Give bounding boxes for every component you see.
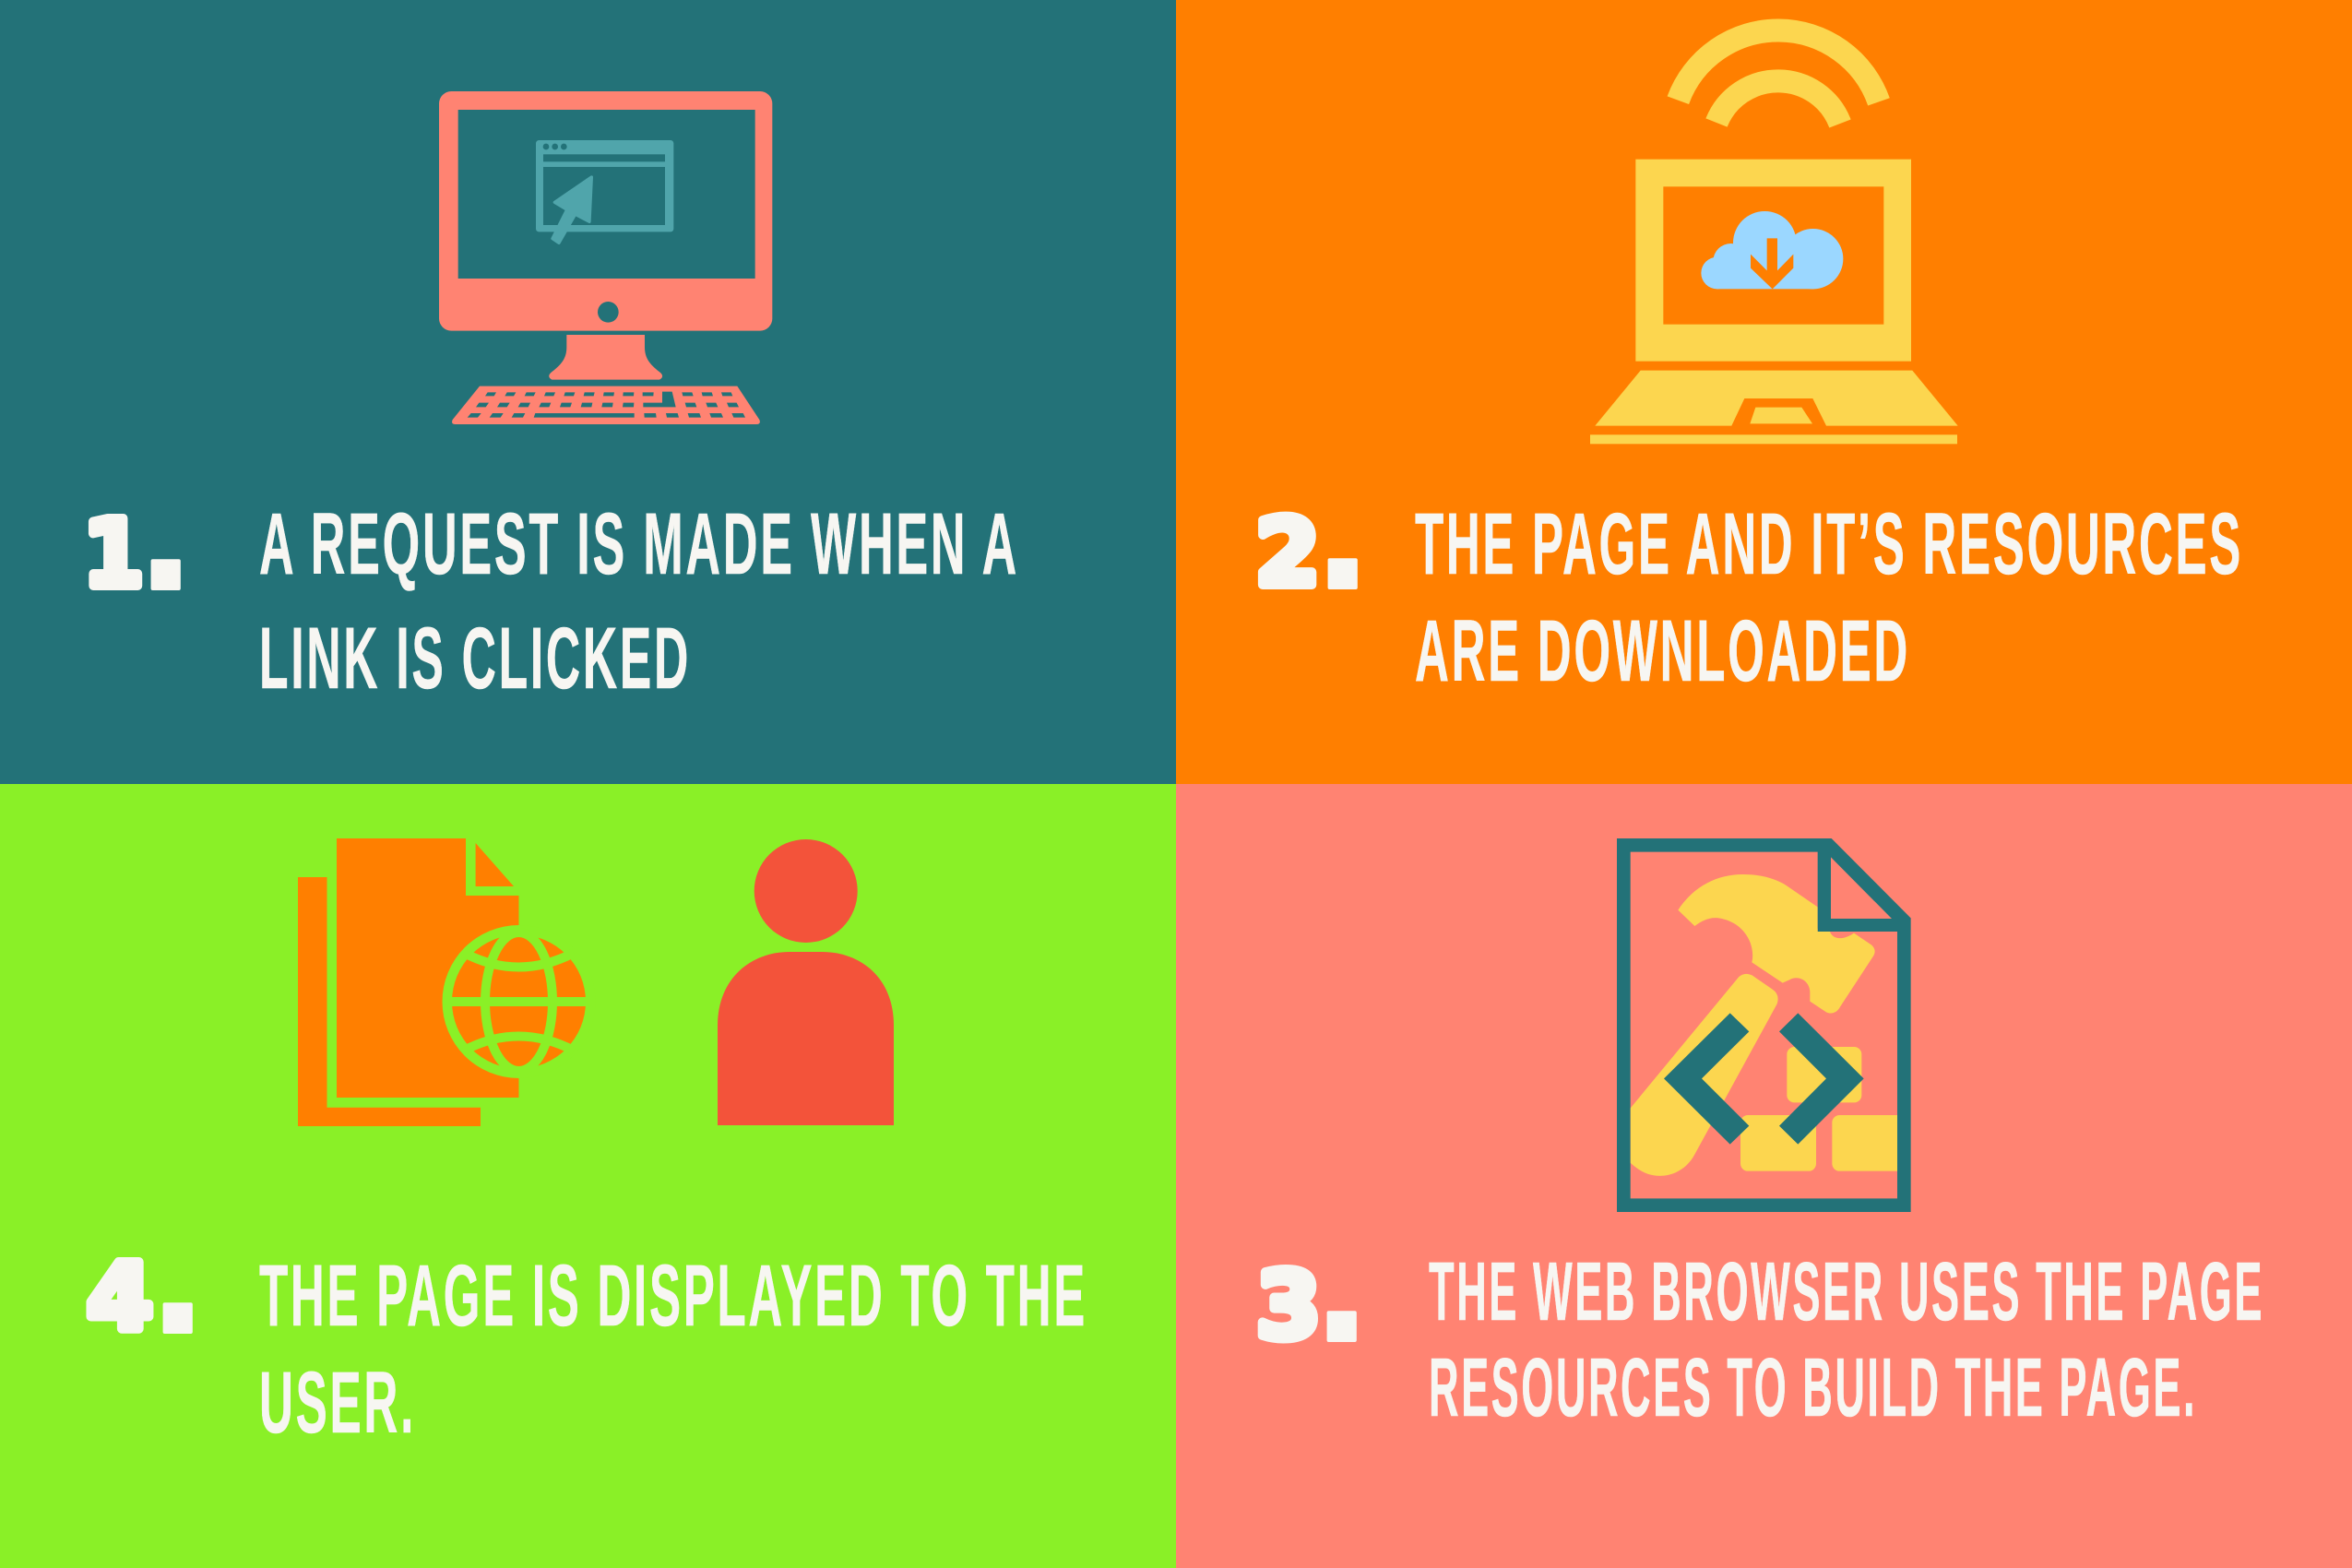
step number 2: 2 xyxy=(1255,499,1320,607)
step 4 text: USER. xyxy=(259,1354,416,1452)
step number 4: . xyxy=(152,1166,204,1372)
step number 3 xyxy=(1256,1174,1368,1380)
step 2 text: ARE DOWNLOADED xyxy=(1415,602,1910,700)
panel: step 1 request xyxy=(0,0,1176,784)
step number 4 xyxy=(87,1166,204,1372)
panel: step 4 display xyxy=(0,784,1176,1568)
step number 1 xyxy=(83,422,192,628)
icon: web documents with globe xyxy=(298,838,596,1126)
step number 3: . xyxy=(1316,1174,1368,1380)
step 1 text: LINK IS CLICKED xyxy=(259,610,691,707)
step 4 text xyxy=(259,1247,1087,1452)
step 1 text xyxy=(259,495,1019,707)
step 1 text: A REQUEST IS MADE WHEN A xyxy=(259,495,1019,593)
icon: laptop with wifi and cloud download xyxy=(1590,30,1958,444)
icon: code document with hammer and bricks xyxy=(1617,838,1912,1212)
step number 2 xyxy=(1255,422,1369,627)
step number 1: . xyxy=(140,422,192,628)
panel: step 3 build xyxy=(1176,784,2352,1568)
icon: desktop computer with browser window and cursor xyxy=(439,91,772,424)
step number 4: 4 xyxy=(87,1243,153,1351)
step 2 text xyxy=(1415,495,2243,700)
panel: step 2 download xyxy=(1176,0,2352,784)
step number 3: 3 xyxy=(1256,1252,1321,1360)
step number 1: 1 xyxy=(83,500,144,608)
step 4 text: THE PAGE IS DISPLAYED TO THE xyxy=(259,1247,1087,1345)
step number 2: . xyxy=(1317,422,1369,627)
icon: user xyxy=(718,839,894,1125)
step 3 text xyxy=(1429,1246,2264,1434)
